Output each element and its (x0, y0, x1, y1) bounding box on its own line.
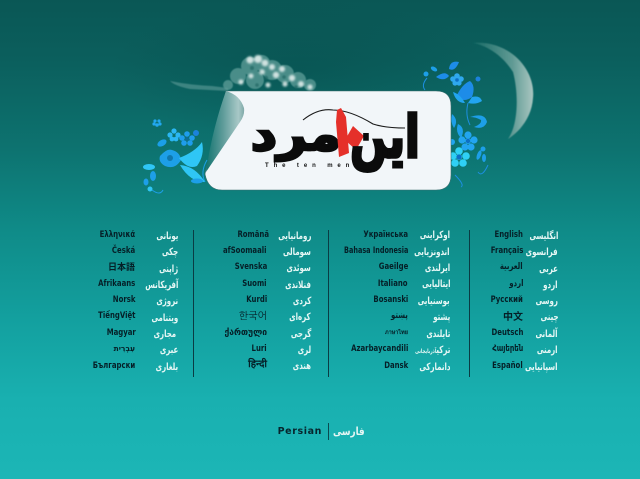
current language: Persian (278, 423, 365, 440)
column 4: language list: العربية (500, 262, 523, 272)
column 2: language list: سومالی (283, 247, 311, 258)
column 3: language list: Bahasa Indonesia (344, 246, 408, 256)
column 4: language list (490, 230, 558, 373)
current language: Persian: Persian (278, 426, 322, 437)
column 1: language list: آفریکانس (145, 280, 178, 291)
column 1: language list: Norsk (112, 295, 135, 305)
column 3: language list: تایلندی (426, 329, 450, 340)
column 2: language list: Svenska (234, 262, 267, 272)
column 1: language list: بلغاری (155, 362, 178, 373)
column 4: language list: English (495, 230, 523, 240)
logo numeral zero (345, 126, 364, 150)
logo word right: این (350, 105, 420, 172)
column 2: language list: فنلاندی (285, 280, 311, 291)
logo (251, 105, 420, 172)
column 4: language list: Español (492, 361, 523, 371)
column 2: language list: هندی (293, 361, 311, 372)
column 3: language list: Gaeilge (379, 262, 408, 272)
cloud (170, 55, 316, 91)
column 4: language list: اردو (509, 279, 523, 289)
column 2: language list: हिन्दी (248, 359, 267, 370)
column 1: language list: עִבְרִית (114, 344, 135, 353)
column 2: language list: کردی (293, 296, 311, 307)
column 2: language list: 한국어 (239, 311, 267, 321)
column 3: language list: ภาษาไทย (385, 330, 408, 336)
column 1: language list: Magyar (107, 328, 136, 338)
flowers left (143, 119, 207, 193)
column 2: language list: Română (237, 230, 269, 240)
column 1: language list (93, 230, 179, 373)
column 3: language list: پښتو (391, 311, 408, 321)
divider (328, 230, 329, 377)
column 2: language list: رومانیایی (278, 231, 311, 242)
column 3: language list: بوسنیایی (418, 296, 450, 307)
column 4: language list: Հայերեն (492, 344, 523, 354)
column 1: language list: مجاری (154, 329, 176, 340)
column 4: language list: فرانسوی (526, 247, 558, 258)
column 1: language list: نروژی (156, 296, 178, 307)
column 1: language list: یونانی (156, 231, 178, 242)
column 3: language list (344, 230, 450, 373)
column 4: language list: چینی (540, 312, 558, 323)
column 2: language list: Suomi (243, 279, 267, 289)
panel: logo card with peeled corner (205, 91, 451, 190)
column 2: language list: گرجی (290, 329, 311, 340)
column 2: language list: afSoomaali (223, 246, 267, 256)
logo numeral one (336, 108, 349, 157)
current language: Persian: فارسی (333, 425, 365, 438)
column 3: language list: اوکراینی (420, 230, 450, 241)
column 2: language list: کره‌ای (290, 312, 311, 323)
column 1: language list: 日本語 (108, 260, 135, 273)
column 4: language list: روسی (536, 296, 558, 307)
column 3: language list: دانمارکی (419, 362, 450, 373)
column 3: language list: Italiano (378, 279, 408, 289)
column 1: language list: Ελληνικά (99, 230, 135, 240)
logo english tagline: The ten men (265, 163, 354, 169)
column 2: language list: سوئدی (287, 263, 311, 274)
logo word left: مرد (251, 108, 341, 161)
column 4: language list: اسپانیایی (525, 362, 558, 373)
divider (193, 230, 194, 377)
column 2: language list: لری (298, 345, 311, 356)
divider (469, 230, 470, 377)
column 4: language list: 中文 (503, 308, 523, 323)
column 3: language list: Bosanski (373, 295, 408, 305)
column 3: language list: ایتالیایی (422, 279, 450, 290)
column 4: language list: Русский (491, 295, 523, 305)
column 1: language list: عبری (160, 345, 178, 356)
column 1: language list: ویتنامی (151, 313, 178, 324)
column 1: language list: Afrikaans (98, 279, 135, 289)
column 4: language list: اردو (544, 280, 558, 291)
column 1: language list: ژاپنی (159, 264, 178, 275)
column 4: language list: Deutsch (491, 328, 523, 338)
column 1: language list: Български (93, 361, 135, 371)
column 3: language list: پشتو (433, 312, 450, 323)
column 3: language list: Azarbaycandili (351, 344, 408, 354)
column 4: language list: ارمنی (537, 345, 558, 356)
column 3: language list: اندونزیایی (415, 247, 450, 258)
column 1: language list: TiếngViệt (98, 311, 135, 321)
moon (473, 43, 533, 139)
column 3: language list: Dansk (384, 361, 408, 371)
icon: page curl (206, 91, 244, 172)
column 1: language list: چکی (162, 247, 178, 258)
column 4: language list: انگلیسی (529, 231, 558, 242)
flowers right (423, 62, 488, 187)
column 3: language list: Українська (363, 230, 408, 240)
column 3: language list: ایرلندی (425, 263, 450, 274)
column 2: language list: Kurdî (246, 295, 267, 305)
column 4: language list: عربی (539, 264, 558, 275)
column 2: language list: ქართული (225, 328, 267, 338)
column 1: language list: Česká (112, 246, 135, 256)
column 4: language list: Français (490, 246, 523, 256)
column 3: language list: ترکیآذربایجانی (415, 345, 450, 356)
column 4: language list: آلمانی (536, 329, 558, 340)
logo arc (303, 110, 405, 128)
column 2: language list: Luri (252, 344, 267, 354)
column 2: language list (223, 230, 312, 372)
